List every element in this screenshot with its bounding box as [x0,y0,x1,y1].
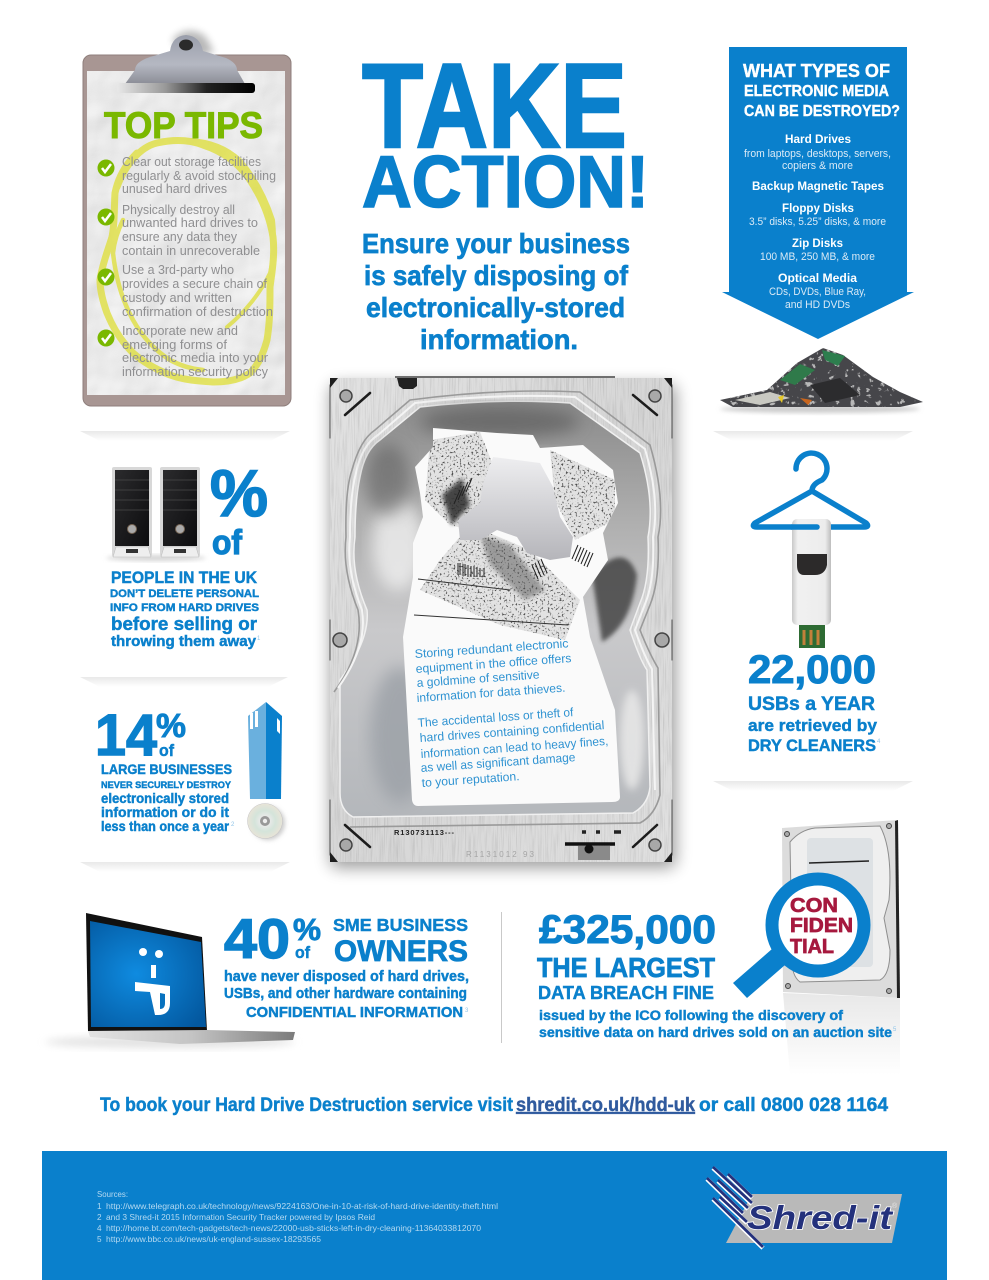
label text: to your reputation. [421,769,520,790]
statistic text [110,569,261,650]
call to action: or call 0800 028 1164 [699,1095,888,1116]
tip 4: electronic media into your [122,350,269,365]
subtitle [362,228,630,355]
tip 2: contain in unrecoverable [122,243,260,258]
statistic text [224,915,469,1021]
statistic text: SME BUSINESS [333,915,468,935]
arrow heading [743,60,900,120]
corner brackets [330,385,672,855]
screws [333,390,669,851]
sources [97,1190,498,1244]
confidential text: TIAL [790,936,834,958]
tip 2: ensure any data they [122,229,237,244]
statistic text: DON’T DELETE PERSONAL [110,588,259,600]
sources: http://www.bbc.co.uk/news/uk-england-sussex-18293565 [106,1235,321,1244]
statistic text: information or do it [101,804,229,820]
media list: CDs, DVDs, Blue Ray, [769,286,866,298]
statistic text: USBs, and other hardware containing [224,986,467,1002]
number 14 percent: 14 [95,703,157,768]
statistic text: PEOPLE IN THE UK [111,569,257,587]
label text: The accidental loss or theft of [417,705,574,730]
heading: top tips: TOP TIPS [104,105,263,146]
statistic text: are retrieved by [748,716,878,735]
sources: 2 [97,1213,102,1222]
statistic text: issued by the ICO following the discovery of [539,1007,843,1023]
tip 1 [98,154,276,196]
drive shadow [330,384,676,868]
tip 2: Physically destroy all [122,202,235,217]
panel: large businesses statistic [95,702,285,840]
media list: copiers & more [782,160,853,172]
statistic text: NEVER SECURELY DESTROY [101,780,232,791]
media list [744,134,891,311]
label text: hard drives containing confidential [419,718,605,745]
tip 4: Incorporate new and [122,323,238,338]
tip 3: custody and written [122,290,232,305]
logo: Shred-it [707,1167,902,1248]
sources: http://www.telegraph.co.uk/technology/news/9224163/One-in-10-at-risk-of-hard-drive-identity-theft.html [106,1202,498,1211]
metal clip [117,31,255,93]
panel: SME business owners statistic [45,907,469,1048]
drive casing [330,378,672,862]
title [362,39,649,223]
icon: magnifying glass [733,879,864,998]
label burn marks [420,432,615,640]
tip 3: confirmation of destruction [122,304,273,319]
statistic text [101,761,235,834]
statistic text: THE LARGEST [537,952,715,983]
statistic text: 4 [877,739,881,745]
icon: USB stick [792,519,831,648]
tip 2 [98,202,260,258]
media list: Zip Disks [792,238,843,250]
panel: hard drive with torn label [330,377,676,868]
arrow shape [722,47,914,339]
tip 3: Use a 3rd-party who [122,262,234,277]
icon: pile of shredded electronics [720,346,925,413]
statistic text [537,908,897,1040]
media list: Optical Media [778,273,858,285]
of label: of [212,524,243,562]
icon: coat hanger [753,453,868,527]
burned hole [458,457,573,560]
number 14 percent: of [159,741,174,760]
statistic text: DRY CLEANERS [748,737,876,755]
sources: 5 [97,1235,102,1244]
tip 4 [98,323,269,379]
tip 4: emerging forms of [122,337,227,352]
panel: people in the UK statistic [106,456,268,650]
panel: data breach fine [537,820,900,1075]
label text: equipment in the office offers [415,651,572,676]
statistic text: have never disposed of hard drives, [224,969,469,985]
tip 1: Clear out storage facilities [122,154,261,169]
sources: Sources: [97,1190,128,1199]
subtitle: information. [420,324,578,355]
confidential text [790,895,853,958]
panel: footer band [42,1151,947,1280]
statistic text: 22,000 [748,648,876,692]
statistic text: DATA BREACH FINE [538,983,714,1003]
cavity reflections [366,406,644,803]
drive cavity [340,401,650,817]
tip 4: information security policy [122,364,268,379]
number 14 percent: % [156,707,186,744]
icon: laptop with smiley [45,913,295,1048]
call to action: shredit.co.uk/hdd-uk [516,1095,695,1116]
icon: office tower [248,702,282,799]
icon: CD [248,804,285,840]
panel: USBs at dry cleaners [748,453,881,755]
statistic text: sensitive data on hard drives sold on an auction site [539,1024,892,1040]
number 40 percent [224,907,321,970]
number 40 percent: of [295,943,310,962]
panel: top tips clipboard [83,31,291,406]
statistic text: electronically stored [101,790,229,806]
yellow highlighter scribble [100,140,274,382]
subtitle: electronically-stored [366,292,625,323]
media list: 100 MB, 250 MB, & more [760,251,875,263]
logo: Shred-it: ® [892,1202,898,1210]
statistic text: LARGE BUSINESSES [101,761,232,777]
label text: Storing redundant electronic [414,636,569,661]
drive markings [394,828,621,860]
call to action: To book your Hard Drive Destruction service visit [100,1095,514,1116]
tip 3 [98,262,273,319]
clipboard board [83,55,291,406]
confidential text: FIDEN [790,915,853,937]
tip 1: regularly & avoid stockpiling [122,168,276,183]
call to action [100,1095,888,1116]
drive markings: R1131012 93 [466,850,535,859]
logo: Shred-it: Shred-it [747,1199,894,1236]
title: ACTION! [362,142,649,223]
torn label [403,428,620,806]
label text [414,636,609,790]
statistic text: CONFIDENTIAL INFORMATION [246,1004,463,1021]
statistic text: 1 [257,636,261,642]
statistic text: INFO FROM HARD DRIVES [110,602,260,614]
label text: information for data thieves. [416,681,566,705]
icon: small hard drive [782,820,900,1075]
statistic text: 2 [231,822,235,828]
statistic text: OWNERS [334,935,468,968]
statistic text [748,648,881,755]
arrow heading: ELECTRONIC MEDIA [744,83,889,100]
statistic text: 3 [465,1008,469,1014]
panel: types of electronic media arrow [722,47,914,339]
media list: Backup Magnetic Tapes [752,181,884,193]
tip 2: unwanted hard drives to [122,215,258,230]
confidential text: CON [790,895,838,917]
statistic text: before selling or [111,614,257,634]
label text: a goldmine of sensitive [416,667,540,690]
statistic text: less than once a year [101,818,229,834]
number 40 percent: 40 [224,907,290,970]
media list: Floppy Disks [782,203,854,215]
media list: from laptops, desktops, servers, [744,148,891,160]
subtitle: is safely disposing of [364,260,629,291]
barcodes [454,478,593,579]
sources: http://home.bt.com/tech-gadgets/tech-news/22000-usb-sticks-left-in-dry-cleaning-11364033812070 [106,1224,481,1233]
media list: Hard Drives [785,134,851,146]
tip 1: unused hard drives [122,181,227,196]
statistic text: USBs a YEAR [748,694,875,715]
paper sheet [87,71,285,395]
statistic text: £325,000 [539,908,716,952]
sources: 1 [97,1202,102,1211]
percent sign: % [210,456,268,530]
title: TAKE [362,39,627,173]
icon: two computer towers [106,467,206,561]
statistic text: 5 [893,1027,897,1033]
statistic text: throwing them away [111,634,256,650]
arrow heading: CAN BE DESTROYED? [744,103,900,120]
label text: as well as significant damage [420,750,576,775]
drive markings: R130731113--- [394,828,454,837]
media list: 3.5” disks, 5.25” disks, & more [749,216,886,228]
media list: and HD DVDs [785,299,850,311]
label text: information can lead to heavy fines, [420,734,609,761]
tip 3: provides a secure chain of [122,276,267,291]
sources: and 3 Shred-it 2015 Information Security Tracker powered by Ipsos Reid [106,1213,375,1222]
subtitle: Ensure your business [362,228,630,259]
arrow heading: WHAT TYPES OF [743,60,890,81]
sources: 4 [97,1224,102,1233]
number 40 percent: % [293,912,321,947]
